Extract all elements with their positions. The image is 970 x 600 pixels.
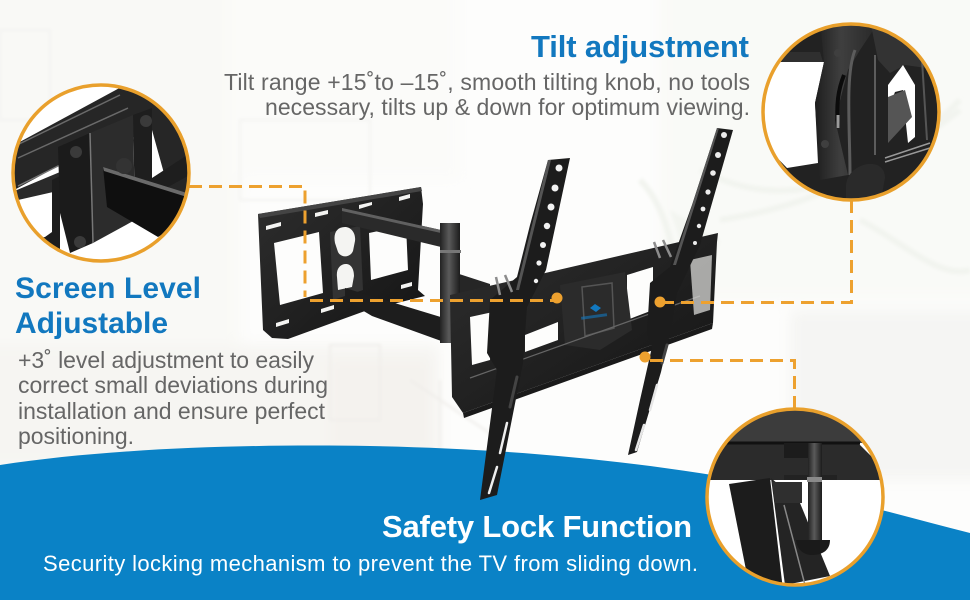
text: screen level description [18, 347, 328, 449]
text: screen level description: installation and ensure perfect [18, 398, 326, 424]
heading: screen level adjustable: Screen Level [15, 272, 201, 305]
wall plate [258, 187, 425, 339]
callout dot: screen level [552, 292, 562, 304]
heading: screen level adjustable [15, 272, 201, 340]
right tilt bracket [628, 128, 733, 455]
detail circle: safety lock [708, 410, 880, 584]
callout line: screen level [189, 186, 305, 297]
callout line: screen level to plate [310, 299, 556, 302]
blue wave [0, 446, 970, 600]
detail circle ring: tilt [763, 24, 939, 200]
left tilt bracket [480, 158, 570, 500]
wall mount product [258, 128, 733, 500]
text: tilt description: necessary, tilts up & down for optimum viewing. [265, 94, 750, 120]
callout line: safety lock [646, 360, 794, 409]
callout dot: safety lock [640, 352, 650, 362]
detail circle: screen level [14, 87, 188, 259]
detail circle: tilt [778, 26, 938, 198]
callout dot: tilt [654, 296, 666, 308]
heading: screen level adjustable: Adjustable [15, 307, 168, 340]
callout line: tilt [661, 200, 852, 302]
text: screen level description: correct small deviations during [18, 372, 328, 398]
TV plate [450, 233, 718, 418]
text: screen level description: +3˚ level adjustment to easily [18, 347, 314, 373]
heading: safety lock function: Safety Lock Function [382, 509, 692, 544]
detail circle ring: screen level [13, 85, 189, 261]
text: safety lock description: Security locking mechanism to prevent the TV from sliding down. [43, 551, 698, 576]
text: screen level description: positioning. [18, 423, 134, 449]
heading: tilt adjustment: Tilt adjustment [531, 29, 749, 64]
text: tilt description: Tilt range +15˚to –15˚, smooth tilting knob, no tools [224, 69, 750, 95]
detail circle ring: safety lock [707, 409, 883, 585]
swing arms [342, 208, 490, 343]
text: tilt description [224, 69, 750, 120]
